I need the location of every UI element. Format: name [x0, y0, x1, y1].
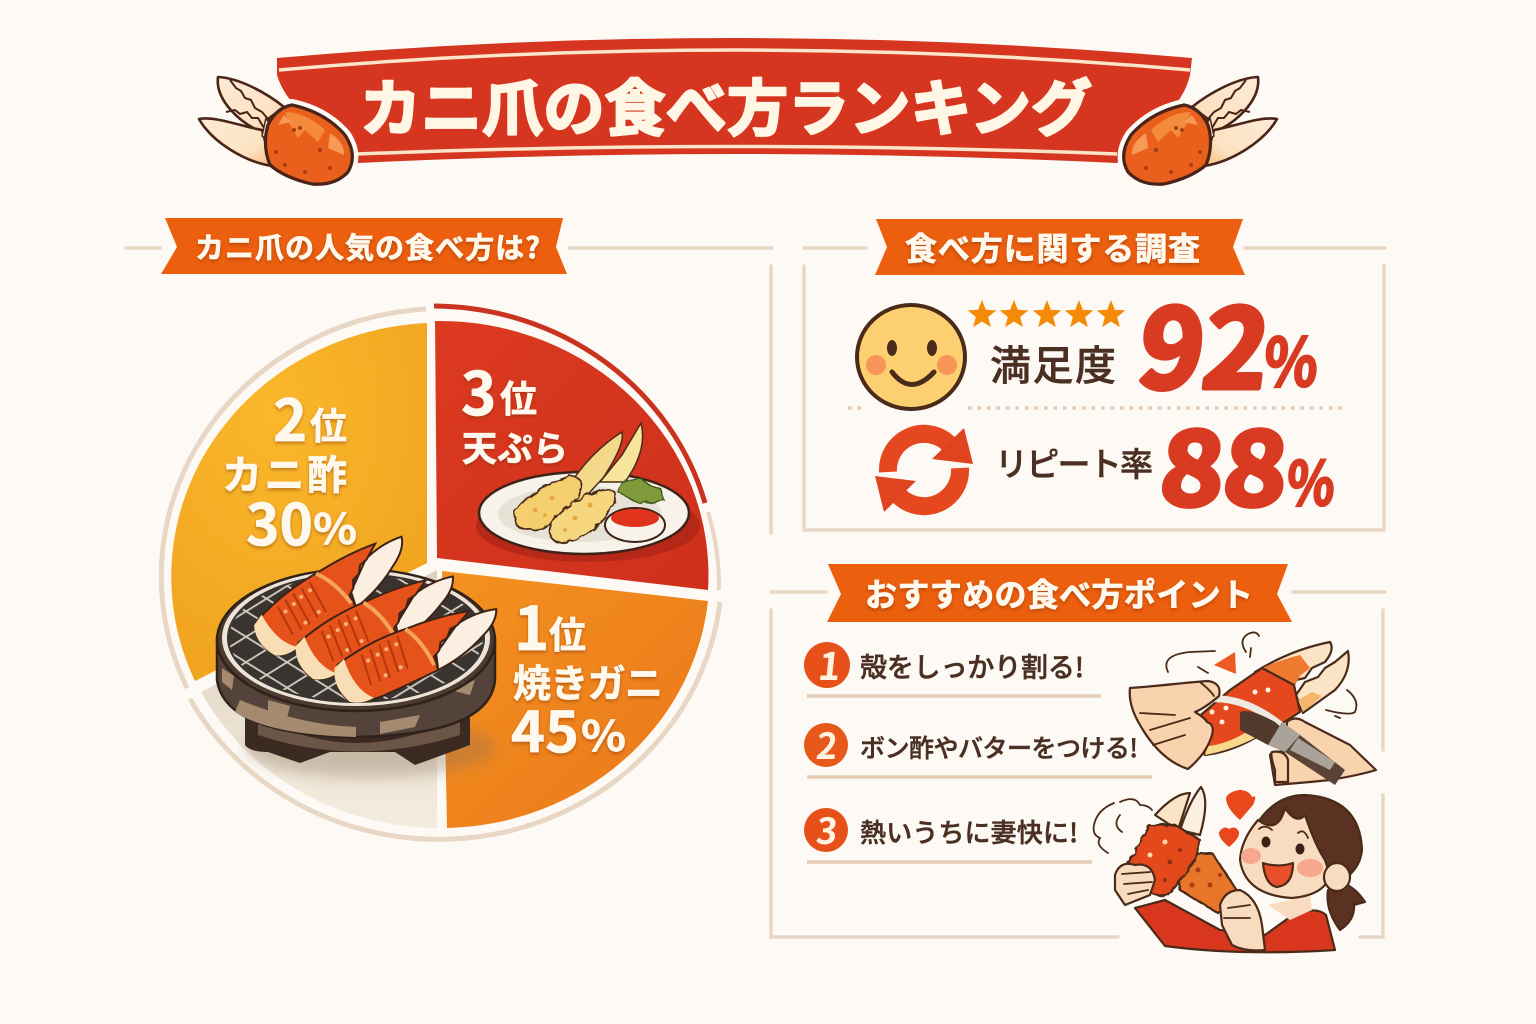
icon: smiley face	[857, 305, 965, 409]
label: 2nd place	[222, 374, 357, 562]
tip 2	[804, 718, 1152, 777]
label: 1st place: %	[581, 703, 626, 764]
panel frame	[804, 248, 1385, 530]
panel: tips	[771, 564, 1385, 952]
label: 2nd place: カニ酢	[222, 443, 347, 501]
section heading: survey	[875, 219, 1245, 275]
slice: 3rd place	[435, 321, 708, 590]
tip 3	[804, 803, 1092, 862]
illustration: girl eating claws	[1094, 787, 1365, 952]
panel: popularity pie	[126, 218, 772, 839]
banner ribbon	[277, 38, 1192, 163]
panel: survey	[804, 219, 1385, 534]
label: 3rd place	[461, 346, 568, 472]
section heading: popular ways	[126, 218, 772, 533]
icon: crab claw right	[1124, 77, 1277, 184]
illustration: grill with crab claws	[217, 525, 511, 778]
label: 2nd place: 位	[310, 396, 347, 450]
tip 1: 殻をしっかり割る!	[860, 646, 1084, 685]
slice: 2nd place	[171, 323, 427, 681]
dotted divider	[848, 406, 1346, 410]
pie chart	[161, 306, 720, 839]
panel frame	[771, 592, 1385, 937]
label: satisfaction: 満足度	[990, 332, 1116, 392]
section heading: popular ways: カニ爪の人気の食べ方は?	[195, 225, 540, 267]
label: 2nd place: %	[313, 496, 357, 557]
label: 2nd place: 2	[273, 374, 307, 458]
tip 1: 1	[816, 636, 844, 691]
stat: 88 percent: 88	[1155, 389, 1294, 534]
label: 3rd place: 位	[500, 369, 537, 423]
label: 1st place: 45	[511, 688, 579, 769]
label: 3rd place: 天ぷら	[462, 421, 568, 472]
slice: remainder	[201, 570, 437, 828]
label: repeat rate: リピート率	[995, 438, 1153, 486]
label: 1st place: 位	[549, 605, 586, 659]
section heading: tips: おすすめの食べ方ポイント	[865, 570, 1253, 616]
illustration: tempura plate	[476, 423, 700, 562]
tip 2: 2	[814, 718, 841, 770]
label: 1st place: 1	[514, 581, 549, 668]
stat: 92 percent: 92	[1131, 261, 1280, 420]
slice: 1st place	[442, 571, 708, 828]
stat: 88 percent: %	[1283, 436, 1339, 523]
section heading: tips	[827, 564, 1292, 622]
illustration: cracking a claw	[1130, 632, 1376, 785]
tip 3: 熱いうちに妻快に!	[860, 813, 1078, 850]
label: 1st place: 焼きガニ	[513, 653, 663, 708]
label: 1st place	[511, 581, 663, 769]
label: 3rd place: 3	[461, 346, 496, 433]
five stars	[968, 300, 1125, 327]
title text: カニ爪の食べ方ランキング	[360, 59, 1092, 148]
icon: repeat arrows	[875, 428, 973, 512]
tip 3: 3	[814, 803, 841, 855]
stat: 92 percent: %	[1260, 310, 1323, 406]
icon: crab claw left	[199, 77, 352, 184]
section heading: survey: 食べ方に関する調査	[905, 224, 1200, 270]
tip 1	[804, 636, 1101, 696]
label: 2nd place: 30	[246, 480, 313, 562]
title banner	[199, 38, 1277, 184]
tip 2: ボン酢やバターをつける!	[860, 729, 1138, 765]
